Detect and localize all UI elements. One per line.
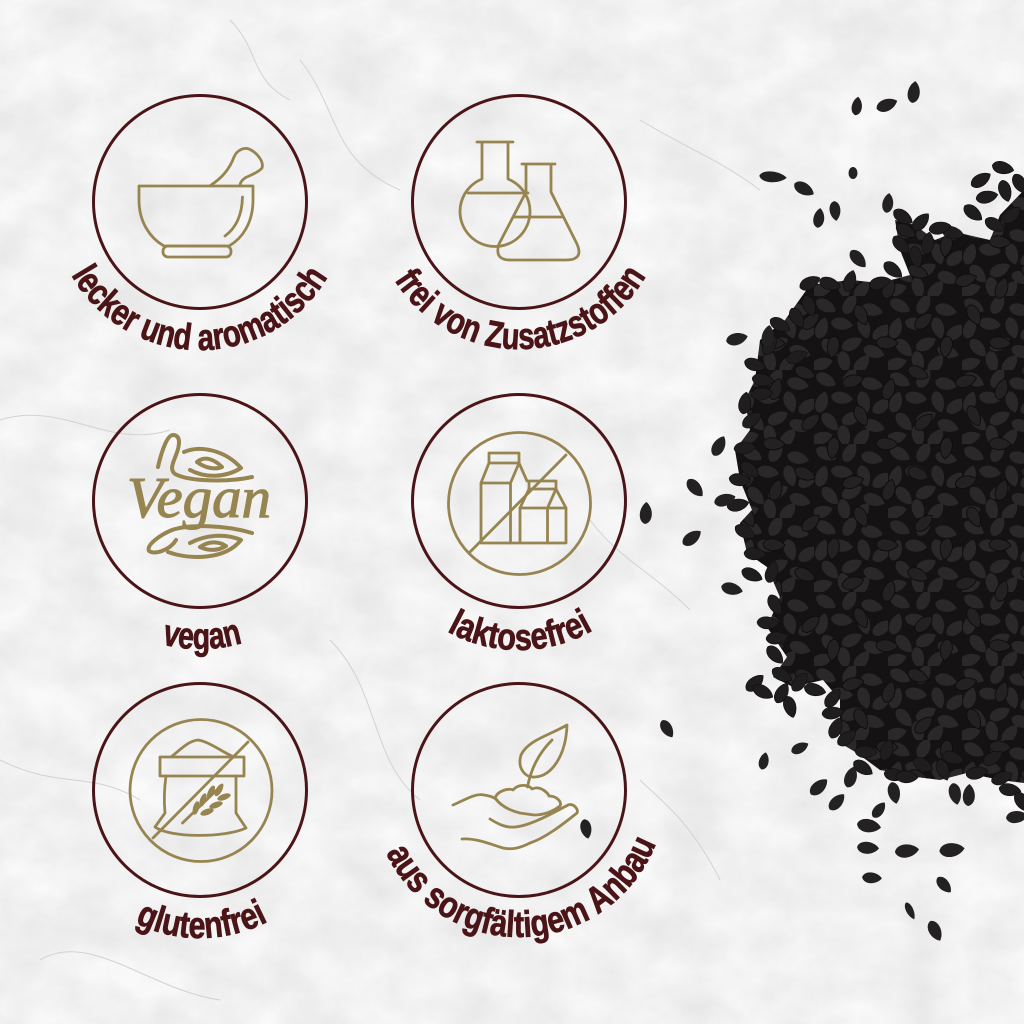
ring <box>94 684 306 896</box>
label: frei von Zusatzstoffen <box>395 268 646 350</box>
panel: glutenfrei <box>92 682 308 939</box>
label: lecker und aromatisch <box>72 262 328 351</box>
label: glutenfrei <box>135 898 267 939</box>
loose seeds <box>579 80 1024 943</box>
label: vegan <box>165 624 242 658</box>
seed pile <box>726 159 1024 814</box>
ring <box>94 96 306 308</box>
ring <box>412 96 626 308</box>
panel: aus sorgfältigem Anbau <box>387 682 656 944</box>
ring <box>94 394 306 608</box>
panel: vegan <box>92 393 308 658</box>
ring <box>412 394 626 608</box>
icon: hand holding seedling <box>453 725 577 849</box>
panel: frei von Zusatzstoffen <box>395 94 646 350</box>
label: aus sorgfältigem Anbau <box>387 836 656 944</box>
panel: laktosefrei <box>411 393 627 651</box>
icon: crossed milk cartons <box>448 432 590 574</box>
icon: vegan lettering with leaves <box>127 435 271 557</box>
icon: flasks <box>460 142 579 260</box>
panel: lecker und aromatisch <box>72 94 328 351</box>
icon: crossed flour sack <box>130 720 272 862</box>
icon: vegan lettering with leaves: Vegan <box>127 465 271 530</box>
label: laktosefrei <box>448 607 592 651</box>
ring <box>412 684 626 896</box>
icon: mortar and pestle <box>139 148 262 257</box>
